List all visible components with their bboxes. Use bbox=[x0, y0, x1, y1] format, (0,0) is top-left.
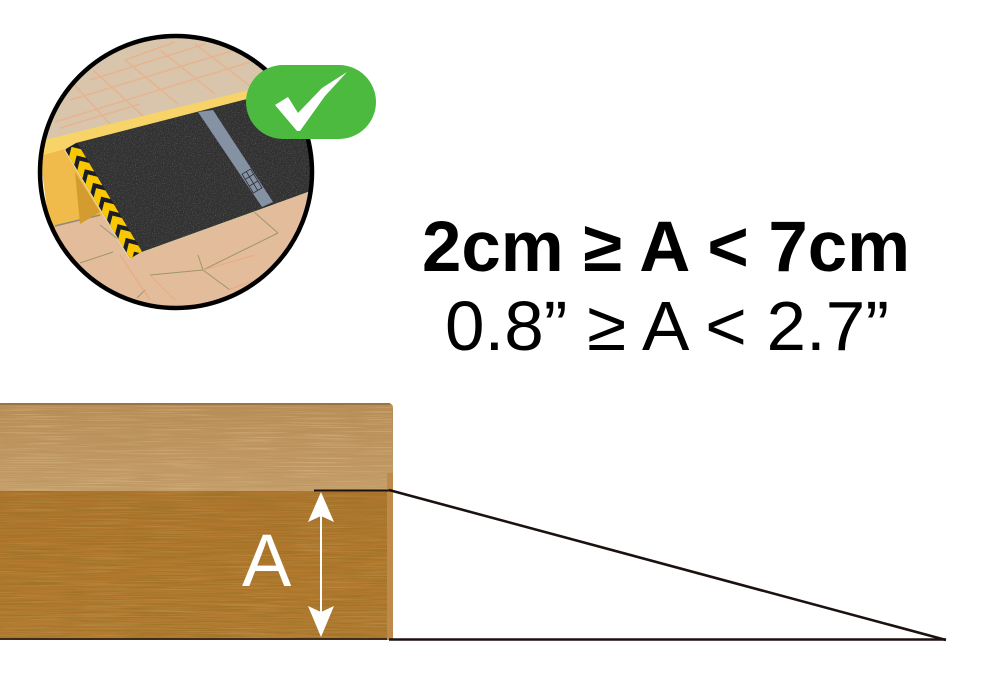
kerb top band bbox=[43, 90, 248, 155]
chevron strip bbox=[65, 142, 144, 262]
pavement lower bbox=[54, 193, 308, 306]
pavement upper bbox=[46, 38, 264, 150]
height label A: A bbox=[242, 519, 292, 602]
ramp profile triangle bbox=[0, 490, 946, 640]
step top face bbox=[0, 403, 393, 491]
ramp bottom edge bbox=[142, 191, 312, 252]
metric height range: 2cm ≥ A < 7cm bbox=[422, 208, 910, 287]
paving joints upper bbox=[55, 42, 250, 129]
height arrow bbox=[308, 492, 334, 637]
ramp surface bbox=[76, 99, 310, 252]
step front face bbox=[0, 473, 393, 640]
approval badge: green pill with check bbox=[246, 65, 376, 139]
paving cracks lower bbox=[80, 212, 278, 298]
icon: check mark bbox=[275, 72, 347, 131]
kerb lower edge bbox=[55, 215, 100, 226]
imperial height range: 0.8” ≥ A < 2.7” bbox=[445, 287, 889, 365]
photo badge: ramp on a kerb bbox=[40, 36, 320, 312]
ramp shadow side bbox=[75, 172, 100, 224]
kerb front bbox=[42, 142, 104, 226]
wooden step bbox=[0, 403, 393, 640]
reflective stripe bbox=[198, 110, 273, 207]
circle border bbox=[40, 36, 312, 308]
stripe label bbox=[242, 169, 262, 193]
